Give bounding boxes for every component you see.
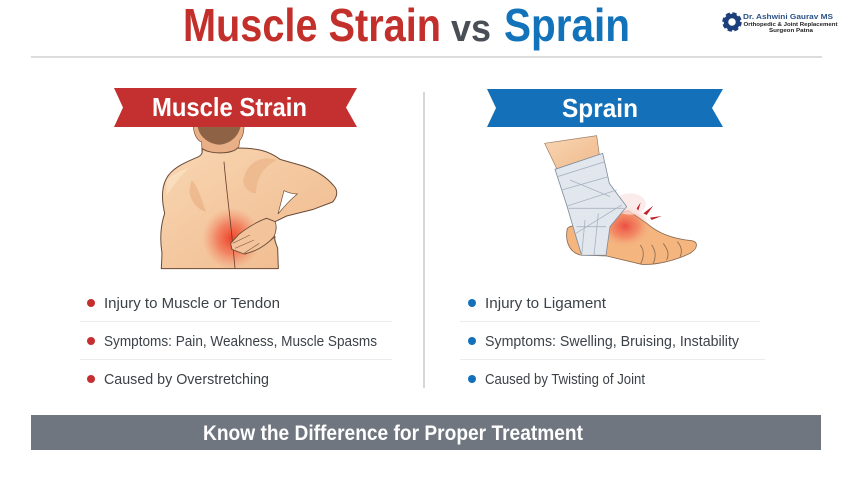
banner: sprain: Sprain <box>562 93 638 123</box>
banner: muscle strain <box>114 88 357 127</box>
bullet 3: Caused by Overstretching <box>104 371 269 388</box>
illustration: bandaged ankle <box>545 136 696 264</box>
spine <box>224 162 235 268</box>
bullet 3: Caused by Twisting of Joint <box>485 371 646 388</box>
foot <box>567 211 696 264</box>
logo: Dr. Ashwini Gaurav MS <box>724 14 838 34</box>
pain marks <box>637 202 662 220</box>
title: Sprain <box>504 0 630 51</box>
panel: muscle strain <box>80 88 392 388</box>
muscle shading <box>243 159 277 193</box>
illustration: back with lower-back pain <box>161 127 337 269</box>
logo: Dr. Ashwini Gaurav MS: Orthopedic & Joint Replacement <box>744 22 838 28</box>
bullet 1: Injury to Ligament <box>485 295 607 312</box>
torso and arm <box>161 148 337 269</box>
swelling glow <box>600 205 650 247</box>
list: sprain facts <box>460 295 765 388</box>
toes <box>640 242 681 264</box>
bullet 2: Symptoms: Swelling, Bruising, Instability <box>485 333 739 350</box>
title <box>183 0 630 51</box>
footer bar: Know the Difference for Proper Treatment <box>203 422 583 445</box>
icon: gear <box>724 14 740 30</box>
title: vs <box>451 8 491 50</box>
head and hair <box>193 127 244 155</box>
logo: Dr. Ashwini Gaurav MS: Dr. Ashwini Gaurav MS <box>743 14 833 21</box>
list: muscle strain facts <box>80 295 392 388</box>
banner: sprain <box>487 89 723 127</box>
bullet 1: Injury to Muscle or Tendon <box>104 295 280 312</box>
logo: Dr. Ashwini Gaurav MS: Surgeon Patna <box>769 28 814 34</box>
bullet 2: Symptoms: Pain, Weakness, Muscle Spasms <box>104 333 377 350</box>
footer bar <box>31 415 821 450</box>
hand <box>231 218 276 254</box>
banner: muscle strain: Muscle Strain <box>152 92 307 122</box>
title: Muscle Strain <box>183 0 441 51</box>
panel: sprain <box>460 89 765 388</box>
gap between torso and arm <box>278 191 297 214</box>
bandage <box>555 153 627 255</box>
leg <box>545 136 599 170</box>
pain glow <box>202 208 261 269</box>
